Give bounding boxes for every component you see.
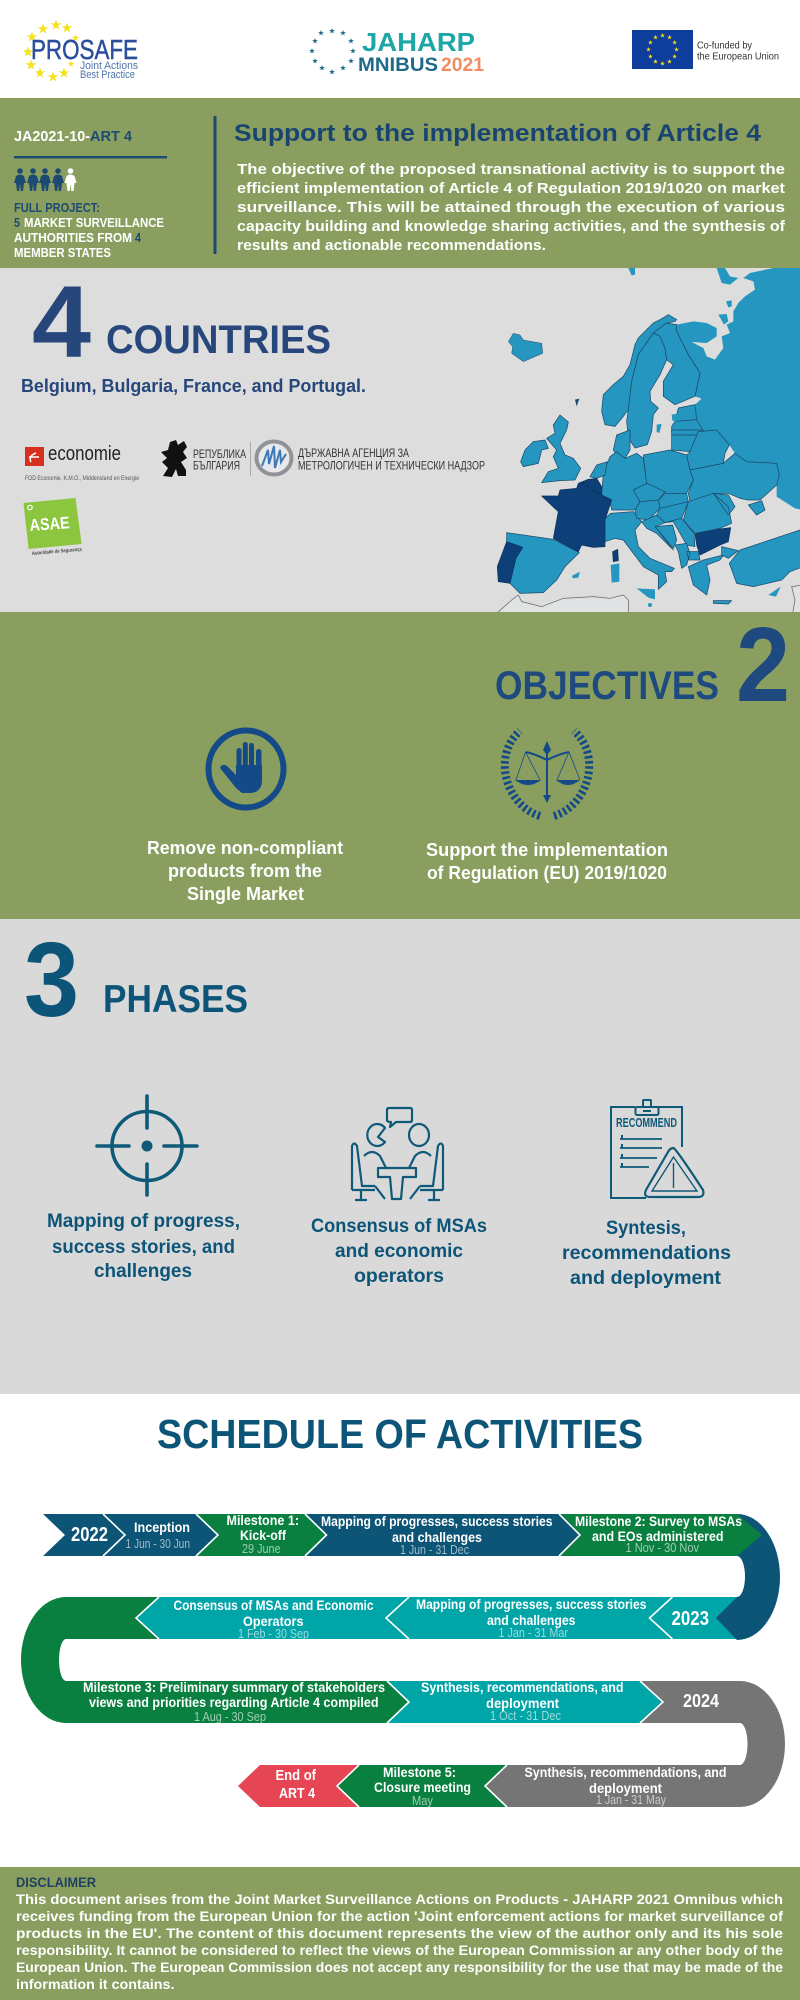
disclaimer text: This document arises from the Joint Market Surveillance Actions on Products - JAHARP 2021 Omnibus which: [16, 1892, 783, 1907]
map: south: [497, 415, 800, 613]
timeline item: consensus: [174, 1598, 374, 1641]
text block: objective: The objective of the proposed transnational activity is to support the: [237, 162, 785, 178]
big number 4: 4: [32, 265, 91, 379]
timeline text: 2022: 2022: [71, 1524, 108, 1546]
phase text: consensus: [311, 1216, 487, 1287]
logo: co-funded by the European Union: Co-funded by: [697, 40, 752, 52]
full project text: MEMBER STATES: [14, 246, 111, 260]
text block: objective: capacity building and knowledge sharing activities, and the synthesis of: [237, 219, 785, 235]
timeline text: 2024: 2024: [683, 1691, 719, 1711]
map of Europe: [497, 268, 800, 613]
objective text: remove: [147, 837, 343, 904]
logo: PROSAFE: Best Practice: [80, 69, 135, 81]
timeline item: synthesis 2024: [524, 1765, 726, 1807]
disclaimer text: [16, 1892, 784, 1992]
logo: Bulgaria metrology agency: [161, 440, 485, 477]
objective text: support: of Regulation (EU) 2019/1020: [427, 862, 667, 883]
map: Iceland: [508, 333, 543, 362]
logo: PROSAFE: Joint Actions: [80, 60, 138, 72]
disclaimer text: European Union. The European Commission does not accept any responsibility for the use that may be made of the: [16, 1960, 783, 1975]
heading: countries: COUNTRIES: [106, 318, 331, 362]
timeline item: end of ART 4: [276, 1767, 317, 1802]
disclaimer text: receives funding from the European Union for the action 'Joint enforcement actions for market surveillance of: [16, 1909, 784, 1924]
big number 2: 2: [736, 606, 790, 724]
panel: disclaimer: [0, 1867, 800, 2000]
timeline item: mapping 2022: Mapping of progresses, success stories: [321, 1514, 552, 1529]
timeline item: synthesis 2023: Synthesis, recommendations, and: [421, 1680, 624, 1695]
logo: economie: [25, 443, 140, 482]
full project text: 4: [135, 231, 141, 245]
timeline item: milestone 3: 1 Aug - 30 Sep: [194, 1710, 266, 1724]
full project text: AUTHORITIES FROM: [14, 231, 132, 245]
icon: recommend clipboard: RECOMMEND: [616, 1116, 677, 1130]
timeline item: synthesis 2024: deployment: [589, 1781, 662, 1796]
logo: economie: FOD Economie, K.M.O., Middenstand en Energie: [25, 476, 140, 482]
full project text: MARKET SURVEILLANCE: [24, 216, 164, 230]
timeline item: inception: 1 Jun - 30 Jun: [126, 1537, 190, 1551]
timeline item: inception: Inception: [134, 1520, 190, 1535]
timeline item: milestone 3: [83, 1680, 385, 1724]
phase text: mapping: [47, 1211, 240, 1282]
text block: objective: efficient implementation of Article 4 of Regulation 2019/1020 on market: [237, 181, 785, 197]
objective text: remove: Single Market: [187, 883, 304, 904]
timeline text: 2023: 2023: [672, 1608, 709, 1630]
phase text: consensus: and economic: [335, 1241, 463, 1262]
full project text: [14, 201, 164, 260]
logo: co-funded by the European Union: [632, 30, 779, 69]
timeline item: milestone 2: 1 Nov - 30 Nov: [626, 1541, 700, 1555]
timeline ribbon: [21, 1514, 785, 1807]
timeline item: mapping 2022: and challenges: [392, 1530, 482, 1545]
phase text: mapping: success stories, and: [52, 1237, 235, 1258]
timeline item: milestone 2: and EOs administered: [592, 1529, 724, 1544]
phase text: mapping: Mapping of progress,: [47, 1211, 240, 1232]
country list: Belgium, Bulgaria, France, and Portugal.: [21, 376, 366, 396]
panel: countries: [0, 265, 800, 613]
logo: economie: economie: [48, 443, 121, 465]
heading: phases: PHASES: [103, 978, 248, 1021]
full project text: FULL PROJECT:: [14, 201, 100, 215]
icon: five people: [14, 168, 76, 191]
disclaimer heading: DISCLAIMER: [16, 1874, 96, 1890]
heading: schedule: SCHEDULE OF ACTIVITIES: [157, 1411, 643, 1457]
timeline item: milestone 1: [226, 1513, 299, 1556]
objective text: support: Support the implementation: [426, 839, 668, 860]
logo: PROSAFE: [23, 20, 138, 81]
full project text: 5: [14, 216, 20, 230]
timeline item: mapping 2023: Mapping of progresses, success stories: [416, 1597, 646, 1612]
disclaimer text: products in the EU'. The content of this document represents the view of the author only and its his sole: [16, 1926, 784, 1941]
timeline item: milestone 5: May: [412, 1794, 434, 1808]
timeline item: consensus: Consensus of MSAs and Economic: [174, 1598, 374, 1613]
logo: Bulgaria metrology agency: ДЪРЖАВНА АГЕНЦИЯ ЗА: [298, 446, 409, 460]
logo: JAHARP Omnibus 2021: [309, 27, 484, 76]
timeline item: milestone 5: Milestone 5:: [383, 1765, 456, 1780]
heading: support to the implementation: Support to the implementation of Article 4: [234, 120, 762, 147]
heading: objectives: OBJECTIVES: [495, 664, 719, 708]
phase text: synthesis: Syntesis,: [606, 1218, 686, 1239]
logo: Bulgaria metrology agency: МЕТРОЛОГИЧЕН И ТЕХНИЧЕСКИ НАДЗОР: [298, 458, 485, 472]
icon: laurel and scales: [505, 731, 589, 816]
panel: project summary: [0, 98, 800, 268]
objective text: remove: Remove non-compliant: [147, 837, 343, 858]
timeline item: mapping 2023: and challenges: [487, 1613, 576, 1628]
timeline item: milestone 1: Kick-off: [240, 1528, 286, 1543]
timeline item: synthesis 2023: deployment: [486, 1696, 559, 1711]
text block: objective: [237, 162, 785, 254]
logo: JAHARP Omnibus 2021: MNIBUS: [358, 54, 438, 76]
timeline item: milestone 5: [374, 1765, 471, 1808]
panel: logo bar: [0, 0, 800, 98]
map: north: [575, 268, 800, 448]
project code: JA2021-10-: [14, 128, 90, 145]
phase text: synthesis: recommendations: [562, 1243, 731, 1264]
icon: crosshair: [97, 1096, 197, 1195]
timeline item: milestone 5: Closure meeting: [374, 1780, 471, 1795]
timeline item: end of ART 4: ART 4: [279, 1785, 316, 1802]
timeline item: mapping 2023: 1 Jan - 31 Mar: [498, 1626, 568, 1640]
timeline item: mapping 2023: [416, 1597, 646, 1640]
logo: ASAE: [24, 498, 82, 557]
panel: phases: [0, 919, 800, 1394]
timeline item: milestone 2: [575, 1514, 742, 1555]
icon: recommend clipboard: [611, 1100, 703, 1198]
text block: objective: results and actionable recommendations.: [237, 238, 546, 254]
logo: JAHARP Omnibus 2021: 2021: [441, 54, 484, 76]
timeline item: synthesis 2024: Synthesis, recommendations, and: [524, 1765, 726, 1780]
disclaimer text: responsibility. It cannot be considered to reflect the views of the European Commission ar any other body of the: [16, 1943, 784, 1958]
timeline item: end of ART 4: End of: [276, 1767, 317, 1784]
project code: ART 4: [90, 128, 133, 145]
timeline item: milestone 3: views and priorities regarding Article 4 compiled: [89, 1695, 378, 1710]
icon: meeting: [352, 1108, 443, 1200]
timeline item: mapping 2022: [321, 1514, 552, 1557]
big number 3: 3: [24, 921, 79, 1039]
logo: PROSAFE: PROSAFE: [31, 34, 138, 65]
logo: ASAE: ASAE: [29, 513, 70, 535]
logo: JAHARP Omnibus 2021: JAHARP: [362, 27, 475, 57]
timeline item: consensus: Operators: [243, 1614, 304, 1629]
logo: ASAE: Autoridade de Segurança: [32, 547, 82, 557]
phase text: synthesis: [562, 1218, 731, 1289]
objective text: remove: products from the: [168, 860, 322, 881]
phase text: consensus: Consensus of MSAs: [311, 1216, 487, 1237]
icon: stop hand: [208, 730, 284, 808]
logo: Bulgaria metrology agency: РЕПУБЛИКА: [193, 447, 246, 461]
panel: objectives: [0, 606, 800, 919]
phase text: synthesis: and deployment: [570, 1268, 722, 1289]
timeline item: milestone 1: 29 June: [242, 1542, 281, 1556]
objective text: support: [426, 839, 668, 883]
timeline item: milestone 1: Milestone 1:: [226, 1513, 299, 1528]
logo: co-funded by the European Union: the European Union: [697, 52, 779, 62]
timeline item: consensus: 1 Feb - 30 Sep: [238, 1627, 309, 1641]
timeline item: milestone 2: Milestone 2: Survey to MSAs: [575, 1514, 742, 1529]
logo: Bulgaria metrology agency: БЪЛГАРИЯ: [193, 458, 240, 472]
panel: schedule of activities: [0, 1394, 800, 1867]
project code: [14, 128, 133, 145]
timeline item: synthesis 2023: 1 Oct - 31 Dec: [490, 1709, 561, 1723]
text block: objective: surveillance. This will be attained through the execution of various: [237, 200, 785, 216]
timeline item: mapping 2022: 1 Jun - 31 Dec: [400, 1543, 469, 1557]
phase text: mapping: challenges: [94, 1261, 192, 1282]
disclaimer text: information it contains.: [16, 1977, 174, 1992]
timeline item: synthesis 2024: 1 Jan - 31 May: [596, 1793, 667, 1807]
timeline item: milestone 3: Milestone 3: Preliminary summary of stakeholders: [83, 1680, 385, 1695]
timeline item: inception: [126, 1520, 190, 1551]
phase text: consensus: operators: [354, 1266, 444, 1287]
timeline item: synthesis 2023: [421, 1680, 624, 1723]
